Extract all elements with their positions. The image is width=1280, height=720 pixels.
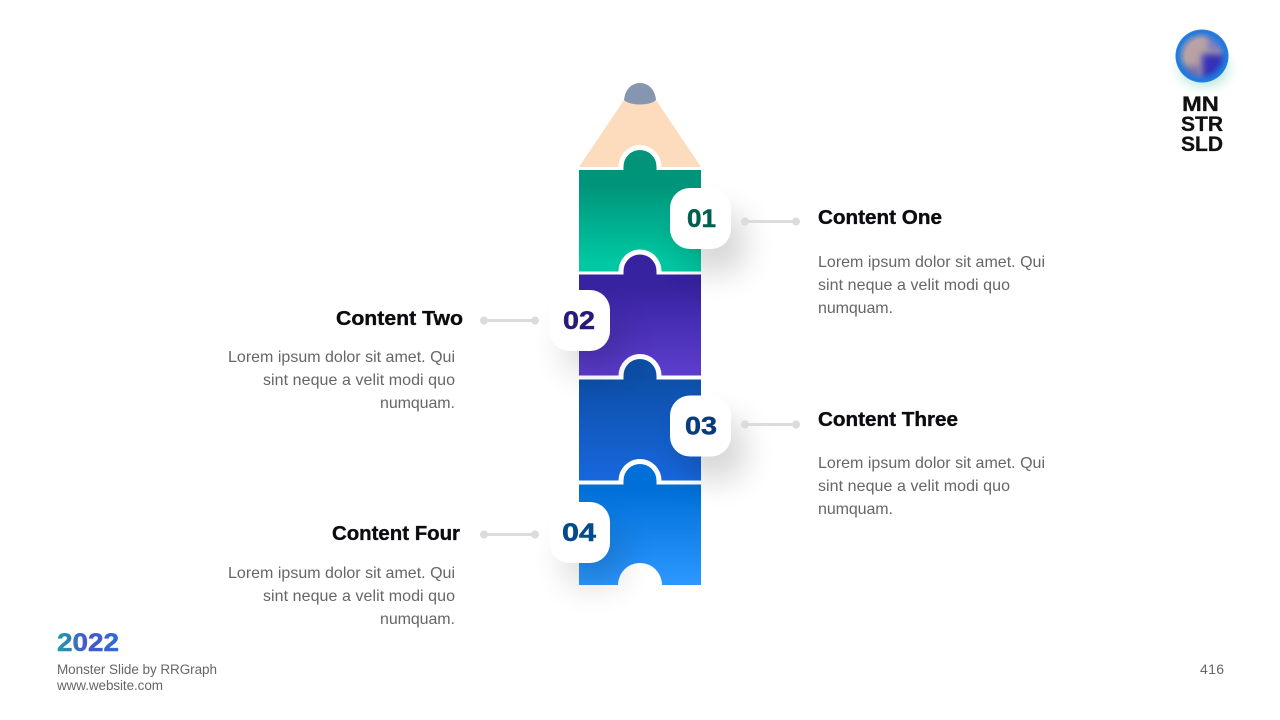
pencil puzzle graphic [579, 83, 701, 585]
badge 03: 03 [685, 412, 717, 440]
text block: content three: Content Three [818, 409, 958, 431]
text block: content four: sint neque a velit modi quo [263, 588, 455, 605]
text block: content two: Lorem ipsum dolor sit amet. Qui [228, 349, 455, 366]
badge 02: 02 [563, 307, 595, 335]
text block: content one [818, 207, 1045, 317]
logo [1174, 30, 1234, 152]
text block: content two: numquam. [380, 395, 455, 412]
footer credit: www.website.com [56, 678, 163, 693]
logo wordmark [1181, 93, 1223, 156]
text block: content two [228, 308, 463, 412]
badge 03 [670, 396, 745, 480]
puzzle piece: purple [579, 250, 701, 376]
text block: content one: Lorem ipsum dolor sit amet. Qui [818, 254, 1045, 271]
connector 02 [480, 316, 539, 324]
text block: content four: Lorem ipsum dolor sit amet. Qui [228, 565, 455, 582]
text block: content four: Content Four [332, 523, 460, 545]
badge 02 [549, 290, 624, 375]
text block: content two: Content Two [336, 308, 463, 330]
text block: content three: sint neque a velit modi quo [818, 478, 1010, 495]
pencil tip [579, 100, 701, 167]
footer credit: Monster Slide by RRGraph [57, 662, 217, 677]
badge 01: 01 [687, 205, 716, 233]
text block: content four: numquam. [380, 611, 455, 628]
text block: content one: numquam. [818, 300, 893, 317]
page number: 416 [1200, 661, 1224, 677]
logo wordmark: STR [1181, 113, 1223, 136]
connector 03 [741, 420, 800, 428]
text block: content three [818, 409, 1045, 518]
badge 01 [670, 188, 745, 273]
logo wordmark: SLD [1181, 133, 1223, 156]
connector 04 [480, 530, 539, 538]
logo wordmark: MN [1182, 93, 1219, 116]
puzzle piece: green [579, 145, 701, 272]
connector 01 [741, 218, 800, 226]
puzzle piece: dark blue [579, 354, 701, 480]
text block: content two: sint neque a velit modi quo [263, 372, 455, 389]
text block: content one: sint neque a velit modi quo [818, 277, 1010, 294]
text block: content three: numquam. [818, 501, 893, 518]
badge 04 [549, 502, 624, 587]
text block: content four [228, 523, 460, 628]
puzzle piece: bright blue [579, 459, 701, 585]
footer year: 2022 [57, 629, 119, 657]
text block: content one: Content One [818, 207, 942, 229]
pencil graphite [624, 83, 656, 104]
footer credit [56, 662, 217, 693]
text block: content three: Lorem ipsum dolor sit amet. Qui [818, 455, 1045, 472]
badge 04: 04 [562, 519, 596, 547]
